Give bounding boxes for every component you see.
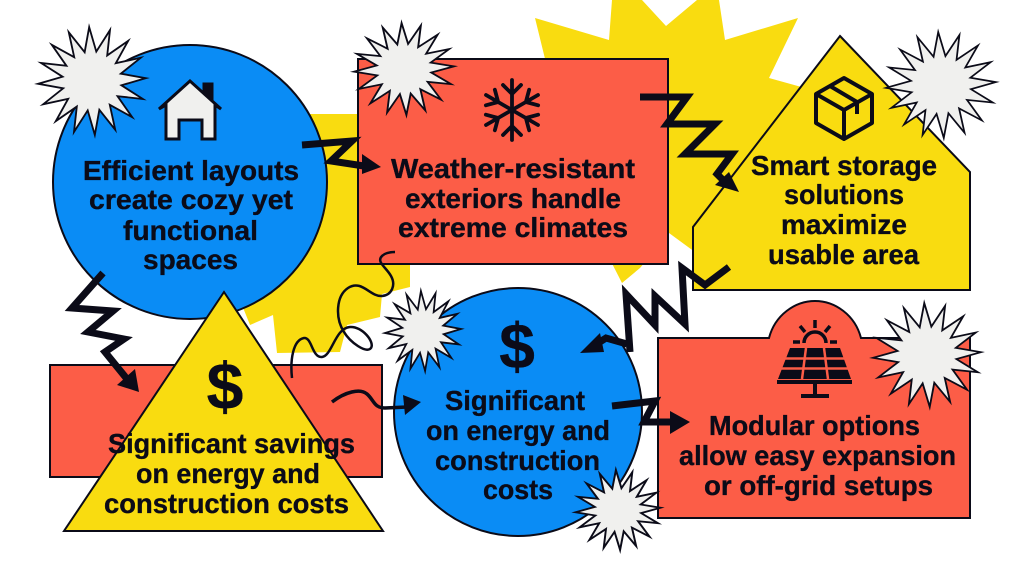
text: weather-resistant: Weather-resistant bbox=[391, 153, 635, 184]
text: weather-resistant: extreme climates bbox=[398, 212, 628, 243]
arrow: circle to triangle bbox=[72, 273, 139, 392]
text: modular options: allow easy expansion bbox=[679, 440, 956, 471]
text: modular options bbox=[679, 410, 956, 501]
starburst: top right bbox=[883, 29, 999, 141]
arrow: circle to red panel bbox=[302, 141, 381, 174]
text: significant on energy: costs bbox=[483, 474, 553, 505]
panel: efficient layouts circle bbox=[53, 45, 327, 319]
icon: house bbox=[159, 81, 221, 139]
text: weather-resistant bbox=[391, 153, 635, 243]
text: efficient layouts: Efficient layouts bbox=[83, 155, 299, 186]
panel: modular options shape bbox=[658, 301, 970, 518]
text: efficient layouts: spaces bbox=[143, 244, 238, 275]
text: efficient layouts: create cozy yet bbox=[89, 184, 293, 215]
panel: significant energy circle bbox=[394, 288, 642, 536]
text: significant savings: Significant savings bbox=[108, 428, 355, 459]
background burst: top right bbox=[535, 0, 805, 283]
text: significant on energy bbox=[426, 385, 610, 505]
text: smart storage: solutions bbox=[784, 179, 904, 210]
starburst: red panel bbox=[352, 20, 456, 118]
squiggle line bbox=[291, 252, 395, 378]
text: smart storage: usable area bbox=[768, 239, 920, 270]
text: significant on energy: construction bbox=[435, 445, 600, 476]
starburst: top left bbox=[35, 24, 149, 138]
starburst: bottom centre bbox=[573, 468, 663, 552]
starburst: right bbox=[870, 300, 984, 410]
text: smart storage bbox=[751, 150, 937, 270]
arrow: circle to modular panel bbox=[612, 401, 690, 434]
text: significant on energy: Significant bbox=[445, 385, 585, 416]
text: smart storage: Smart storage bbox=[751, 150, 937, 181]
panel: red bar behind triangle bbox=[50, 365, 382, 477]
arrow: curved to circle bbox=[332, 391, 421, 415]
text: smart storage: maximize bbox=[781, 209, 907, 240]
starburst: centre bbox=[383, 289, 463, 373]
text: significant savings: on energy and bbox=[136, 458, 320, 489]
panel: smart storage house shape bbox=[693, 36, 970, 290]
text: modular options: or off-grid setups bbox=[704, 470, 933, 501]
text: significant on energy: on energy and bbox=[426, 415, 610, 446]
arrow: red panel to house bbox=[640, 97, 739, 192]
text: efficient layouts bbox=[83, 155, 299, 275]
text: modular options: Modular options bbox=[709, 410, 920, 441]
icon: box bbox=[816, 78, 872, 139]
icon: solar panel bbox=[777, 320, 852, 396]
arrow: house to circle bbox=[580, 267, 729, 353]
icon: dollar sign: $ bbox=[499, 310, 535, 382]
icon: dollar sign: $ bbox=[207, 349, 243, 423]
text: significant savings bbox=[104, 428, 355, 519]
text: efficient layouts: functional bbox=[123, 215, 258, 246]
panel: weather-resistant rectangle bbox=[358, 59, 668, 264]
background burst: centre left bbox=[240, 114, 410, 353]
text: significant savings: construction costs bbox=[104, 488, 349, 519]
panel: significant savings triangle bbox=[64, 292, 383, 531]
icon: snowflake bbox=[482, 80, 542, 140]
text: weather-resistant: exteriors handle bbox=[405, 183, 621, 214]
